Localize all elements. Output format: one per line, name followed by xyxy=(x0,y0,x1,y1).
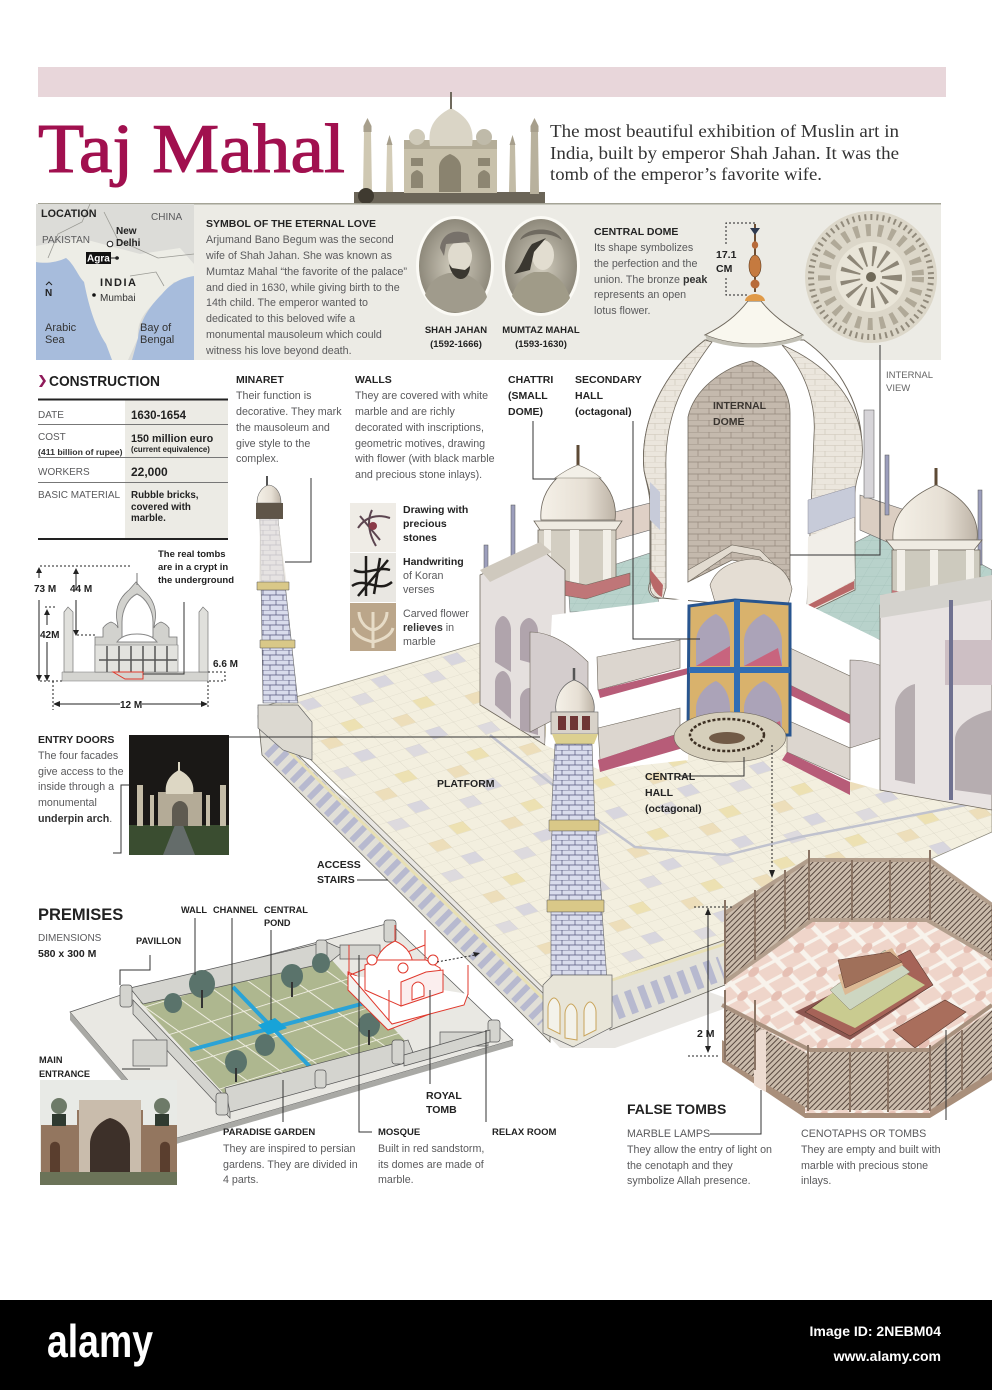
text: central dome: CENTRAL DOME xyxy=(594,226,678,238)
text: chattri and secondary hall labels xyxy=(508,374,642,418)
labels on platform: PLATFORM xyxy=(437,778,495,790)
profile diagram with dimensions: 6.6 M xyxy=(213,659,238,670)
label: internal view: VIEW xyxy=(886,383,910,394)
profile diagram with dimensions xyxy=(34,566,238,711)
panel: construction table: (411 billion of rupee) xyxy=(38,447,123,457)
intro text xyxy=(550,121,899,184)
panel: construction table: Rubble bricks, xyxy=(131,490,199,501)
premises plan xyxy=(70,920,513,1144)
portrait captions xyxy=(425,325,580,350)
text: decoration sample labels: precious xyxy=(403,518,447,530)
panel: construction table: marble. xyxy=(131,513,166,524)
label: entry doors: give access to the xyxy=(38,766,124,778)
text: decoration sample labels: of Koran xyxy=(403,570,443,582)
map: location of Agra in India: Bengal xyxy=(140,334,174,346)
illustration: central hall xyxy=(674,712,786,762)
garden trees xyxy=(164,953,380,1082)
footer bar: alamy: www.alamy.com xyxy=(833,1348,941,1364)
panel: construction table: 150 million euro xyxy=(131,433,214,445)
text: walls: decorated with inscriptions, xyxy=(355,422,484,434)
panel: construction table: CONSTRUCTION xyxy=(49,374,160,390)
text: decoration sample labels: Handwriting xyxy=(403,556,464,568)
text: paradise garden: They are inspired to persian xyxy=(223,1143,356,1155)
text: false tombs: MARBLE LAMPS xyxy=(627,1128,710,1140)
illustration: front minaret xyxy=(543,668,612,1047)
labels: premises plan xyxy=(39,905,556,1138)
text: false tombs: FALSE TOMBS xyxy=(627,1101,726,1117)
label: internal view: INTERNAL xyxy=(886,370,933,381)
footer bar: alamy xyxy=(0,1300,992,1390)
text: central dome xyxy=(594,226,707,317)
text: chattri and secondary hall labels: HALL xyxy=(575,390,604,402)
illustration: central dome cut-away xyxy=(644,224,862,612)
text: chattri and secondary hall labels: (octagonal) xyxy=(575,406,632,418)
garden xyxy=(140,958,407,1097)
label: internal dome xyxy=(713,400,767,428)
panel: construction table: BASIC MATERIAL xyxy=(38,490,120,501)
profile diagram with dimensions: 44 M xyxy=(70,584,92,595)
text: minaret: decorative. They mark xyxy=(236,406,342,418)
portrait captions: (1592-1666) xyxy=(430,339,482,350)
heading: premises: PREMISES xyxy=(38,906,123,924)
panel: construction table: 1630-1654 xyxy=(131,410,187,422)
map: location of Agra in India: Sea xyxy=(45,334,65,346)
labels: premises plan: PAVILLON xyxy=(136,936,181,946)
note: real tombs xyxy=(158,549,234,586)
text: chattri and secondary hall labels: (SMALL xyxy=(508,390,548,402)
map: location of Agra in India: Arabic xyxy=(45,322,77,334)
main illustration: roof terraces xyxy=(568,495,992,640)
labels on platform: CENTRAL xyxy=(645,771,696,783)
note: real tombs: The real tombs xyxy=(158,549,226,560)
panel: construction table xyxy=(38,374,228,539)
illustration: left minaret xyxy=(256,476,312,760)
map: location of Agra in India: N xyxy=(45,288,52,299)
swatches: decoration samples xyxy=(350,503,396,651)
text: minaret: MINARET xyxy=(236,374,284,386)
text: mosque: Built in red sandstorm, xyxy=(378,1143,484,1155)
platform wall left xyxy=(258,716,550,1042)
text: central dome: union. The bronze peak xyxy=(594,274,707,286)
arrows and dashed connectors xyxy=(437,745,775,1056)
labels on platform xyxy=(317,771,715,1040)
text: cenotaphs: inlays. xyxy=(801,1175,831,1187)
panel: construction table: (current equivalence) xyxy=(131,445,210,454)
text: decoration sample labels xyxy=(403,504,469,648)
panel: construction table: 22,000 xyxy=(131,465,168,479)
map: location of Agra in India: PAKISTAN xyxy=(42,235,90,246)
title: Taj Mahal xyxy=(38,111,345,188)
map: location of Agra in India: CHINA xyxy=(151,212,182,223)
text: mosque xyxy=(378,1127,484,1186)
text: symbol of the eternal love xyxy=(205,218,407,357)
label: internal view xyxy=(886,370,933,394)
label: entry doors: underpin arch. xyxy=(38,813,112,825)
text: chattri and secondary hall labels: DOME) xyxy=(508,406,543,418)
text: symbol of the eternal love: 14th child. The emperor wanted to xyxy=(206,297,368,309)
text: central dome: Its shape symbolizes xyxy=(594,242,693,254)
text: walls: WALLS xyxy=(355,374,392,386)
text: minaret: complex. xyxy=(236,453,279,465)
label: internal dome: DOME xyxy=(713,416,744,428)
heading: premises: 580 x 300 M xyxy=(38,948,97,960)
royal tomb outline in red xyxy=(348,925,468,1030)
map: location of Agra in India: New xyxy=(116,226,137,237)
text: symbol of the eternal love: SYMBOL OF THE ETERNAL LOVE xyxy=(206,218,376,230)
text: mosque: marble. xyxy=(378,1174,414,1186)
labels: premises plan: WALL xyxy=(181,905,207,915)
text: paradise garden xyxy=(223,1127,358,1186)
panel: construction table: WORKERS xyxy=(38,467,90,478)
text: decoration sample labels: stones xyxy=(403,532,437,544)
labels on platform: ACCESS xyxy=(317,859,361,871)
text: symbol of the eternal love: witness his love beyond death. xyxy=(205,345,352,357)
heading: premises: DIMENSIONS xyxy=(38,933,102,944)
labels: premises plan: MAIN xyxy=(39,1055,63,1065)
portrait captions: SHAH JAHAN xyxy=(425,325,487,336)
cenotaphs xyxy=(795,948,966,1048)
text: minaret: Their function is xyxy=(236,390,311,402)
labels: premises plan: POND xyxy=(264,918,291,928)
profile diagram with dimensions: 12 M xyxy=(120,700,142,711)
text: cenotaphs: They are empty and built with xyxy=(801,1144,941,1156)
profile diagram with dimensions: 73 M xyxy=(34,584,56,595)
header band xyxy=(38,67,946,97)
labels on platform: STAIRS xyxy=(317,874,355,886)
intro text: tomb of the emperor’s favorite wife. xyxy=(550,164,822,184)
text: walls xyxy=(354,374,495,481)
dome cap xyxy=(705,294,803,348)
label: peak height: 17.1 xyxy=(716,249,737,261)
bronze peak xyxy=(749,224,761,292)
labels: premises plan: RELAX ROOM xyxy=(492,1127,556,1138)
illustration: false tomb octagon xyxy=(722,850,992,1118)
portrait captions: (1593-1630) xyxy=(515,339,567,350)
text: central dome: represents an open xyxy=(594,289,686,301)
labels: premises plan: CHANNEL xyxy=(213,905,258,915)
text: decoration sample labels: verses xyxy=(403,584,434,596)
text: cenotaphs xyxy=(801,1128,941,1187)
text: walls: and precious stone inlays). xyxy=(355,469,482,481)
photo: entry doors night view xyxy=(129,735,229,855)
footer bar: alamy: Image ID: 2NEBM04 xyxy=(810,1323,941,1339)
platform wall right xyxy=(610,940,725,1030)
icon: internal view rosette xyxy=(805,211,937,343)
illustration: secondary hall octagonal xyxy=(688,559,792,745)
label: peak height: CM xyxy=(716,263,733,275)
note: real tombs: the underground xyxy=(158,575,234,586)
heading: premises xyxy=(38,906,123,960)
text: decoration sample labels: Carved flower xyxy=(403,608,469,620)
text: chattri and secondary hall labels: SECONDARY xyxy=(575,374,642,386)
main illustration: back minarets xyxy=(484,410,982,650)
map: location of Agra in India: LOCATION xyxy=(41,208,97,220)
profile diagram with dimensions: 42M xyxy=(40,630,59,641)
label: entry doors: inside through a xyxy=(38,781,114,793)
label: entry doors xyxy=(38,734,124,825)
main illustration: platform xyxy=(258,640,992,1048)
text: false tombs: symbolize Allah presence. xyxy=(627,1175,751,1187)
text: symbol of the eternal love: monumental mausoleum which could xyxy=(206,329,382,341)
panel: location and biography xyxy=(38,203,941,360)
map: location of Agra in India: Agra xyxy=(87,254,110,264)
photo: Taj Mahal elevation xyxy=(354,92,545,204)
text: walls: marble and are richly xyxy=(355,406,455,418)
text: walls: geometric motives, drawing xyxy=(355,438,485,450)
text: symbol of the eternal love: and died in 1630, while giving birth to the xyxy=(206,282,400,294)
note: real tombs: are in a crypt in xyxy=(158,562,228,573)
text: decoration sample labels: relieves in xyxy=(403,622,454,634)
panel: construction table: COST xyxy=(38,432,66,443)
map: location of Agra in India xyxy=(36,204,194,360)
text: symbol of the eternal love: Mumtaz Mahal “the favorite of the palace” xyxy=(206,266,407,278)
illustration: right chattri small dome xyxy=(886,468,982,612)
text: false tombs xyxy=(627,1101,772,1187)
labels: premises plan: ENTRANCE xyxy=(39,1069,90,1079)
label: entry doors: monumental xyxy=(38,797,97,809)
map: location of Agra in India: Delhi xyxy=(116,238,141,249)
illustration: right facade xyxy=(880,575,992,810)
footer bar: alamy: alamy xyxy=(47,1315,153,1367)
panel: construction table: covered with xyxy=(131,502,191,513)
text: mosque: MOSQUE xyxy=(378,1127,420,1138)
text: symbol of the eternal love: dedicated to this beloved wife a xyxy=(206,313,355,325)
panel: construction table: DATE xyxy=(38,410,64,421)
text: minaret xyxy=(236,374,342,465)
text: cenotaphs: CENOTAPHS OR TOMBS xyxy=(801,1128,926,1140)
text: cenotaphs: marble with precious stone xyxy=(801,1160,928,1172)
text: paradise garden: 4 parts. xyxy=(223,1174,259,1186)
text: chattri and secondary hall labels: CHATTRI xyxy=(508,374,553,386)
label: entry doors: The four facades xyxy=(38,750,118,762)
labels: premises plan: TOMB xyxy=(426,1104,457,1116)
portrait: Mumtaz Mahal xyxy=(502,216,580,316)
labels on platform: 2 M xyxy=(697,1028,715,1040)
text: central dome: lotus flower. xyxy=(594,305,650,317)
map: location of Agra in India: Mumbai xyxy=(100,293,136,304)
portrait: Shah Jahan xyxy=(416,216,494,316)
leader lines xyxy=(113,345,946,1134)
text: false tombs: the cenotaph and they xyxy=(627,1160,733,1172)
text: walls: They are covered with white xyxy=(355,390,488,402)
illustration: cut walls and corridors xyxy=(530,596,912,795)
label: entry doors: ENTRY DOORS xyxy=(38,734,114,746)
text: decoration sample labels: Drawing with xyxy=(403,504,468,516)
text: false tombs: They allow the entry of light on xyxy=(627,1144,772,1156)
label: peak height xyxy=(716,223,755,295)
text: decoration sample labels: marble xyxy=(403,636,436,648)
text: minaret: the mausoleum and xyxy=(236,422,330,434)
intro text: The most beautiful exhibition of Muslin art in xyxy=(550,121,899,141)
intro text: India, built by emperor Shah Jahan. It was the xyxy=(550,143,899,163)
text: mosque: its domes are made of xyxy=(378,1159,484,1171)
illustration: left facade xyxy=(480,542,565,745)
photo: main entrance gate xyxy=(40,1080,177,1185)
text: paradise garden: PARADISE GARDEN xyxy=(223,1127,315,1138)
labels on platform: (octagonal) xyxy=(645,803,702,815)
labels: premises plan: CENTRAL xyxy=(264,905,308,915)
labels: premises plan: ROYAL xyxy=(426,1090,462,1102)
garden walls xyxy=(120,920,500,1118)
text: walls: with flower (with black marble xyxy=(354,453,495,465)
text: symbol of the eternal love: Arjumand Bano Begum was the second xyxy=(206,234,394,246)
map: location of Agra in India: Bay of xyxy=(140,322,172,334)
text: central dome: the perfection and the xyxy=(594,258,697,270)
portrait captions: MUMTAZ MAHAL xyxy=(502,325,580,336)
text: minaret: give style to the xyxy=(236,438,310,450)
label: internal dome: INTERNAL xyxy=(713,400,767,412)
labels on platform: HALL xyxy=(645,787,674,799)
map: location of Agra in India: INDIA xyxy=(100,277,137,289)
illustration: left chattri small dome xyxy=(534,445,630,599)
text: paradise garden: gardens. They are divided in xyxy=(223,1159,358,1171)
text: symbol of the eternal love: wife of Shah Jahan. She was known as xyxy=(205,250,392,262)
